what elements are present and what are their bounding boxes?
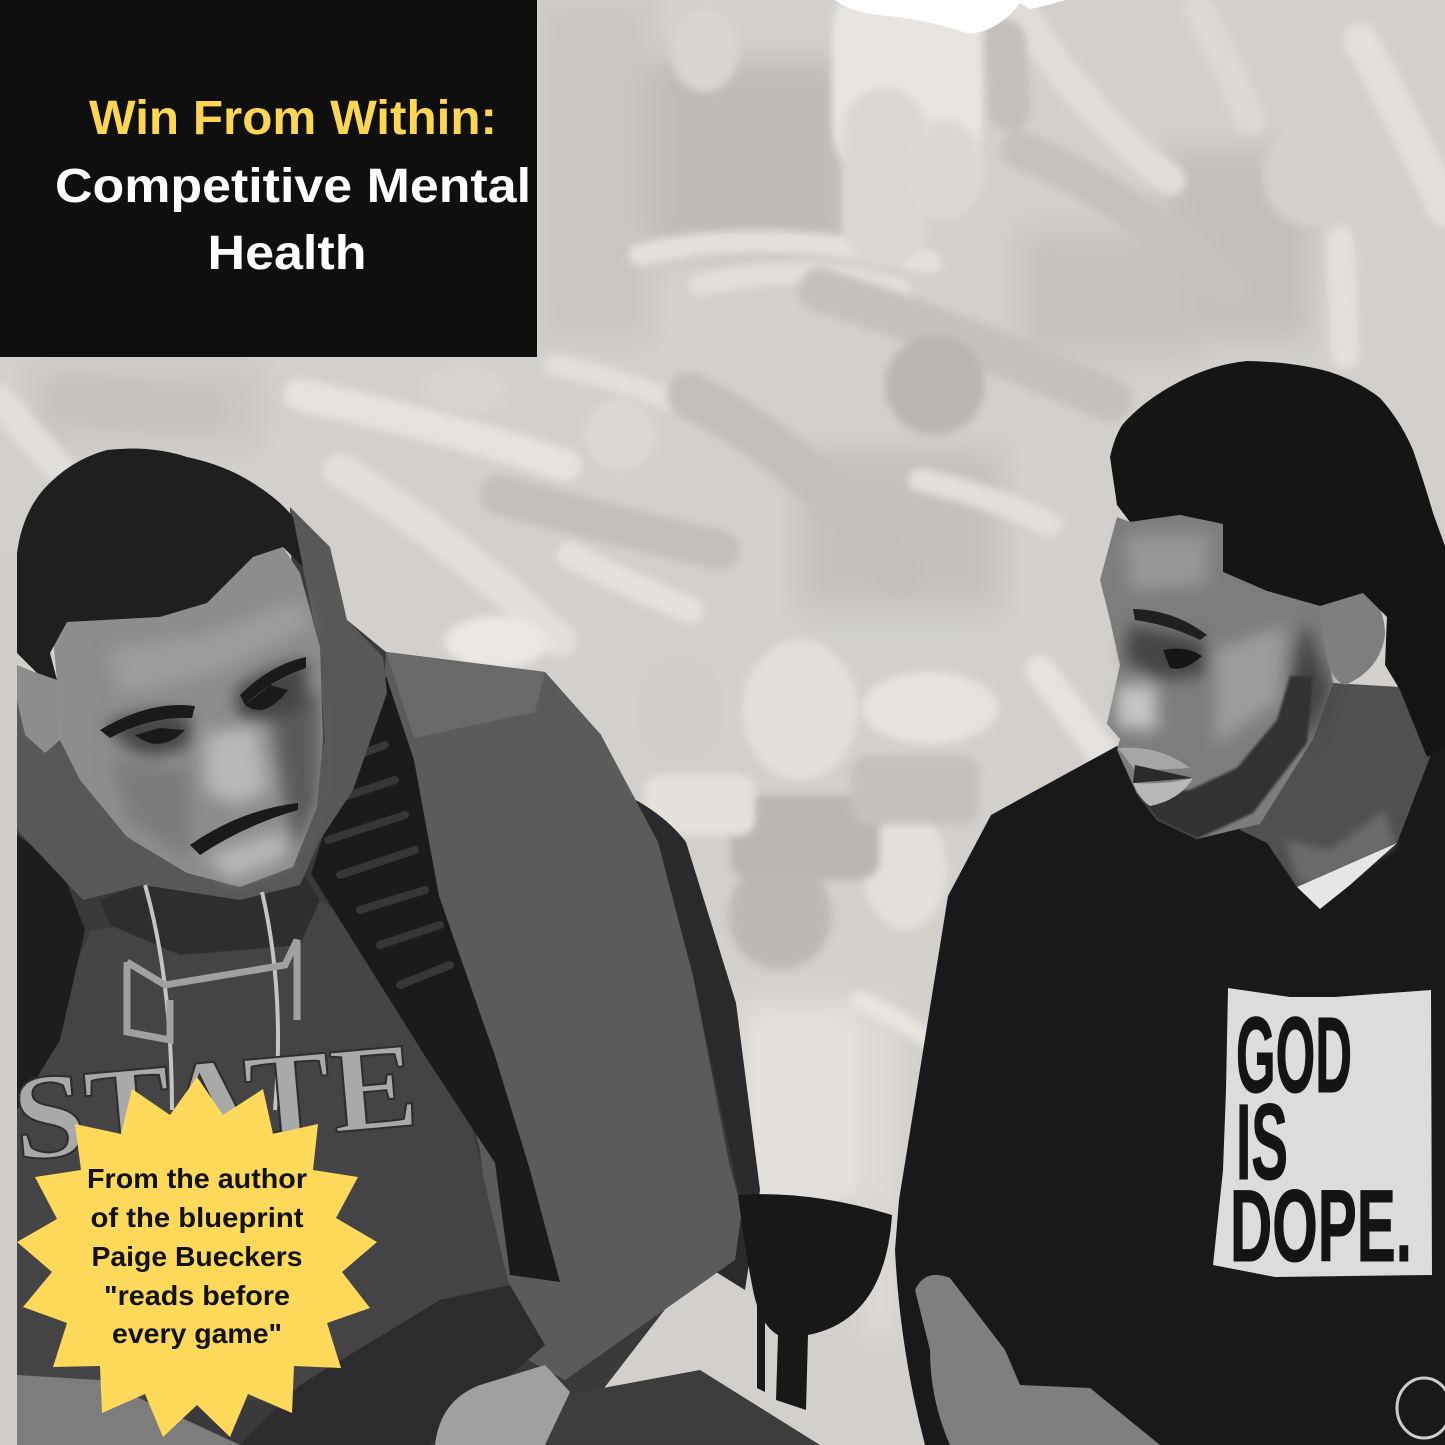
left strip: photo edge: [0, 553, 17, 1445]
left man: backpack strap right: [311, 676, 560, 1282]
right man: face: [1100, 515, 1333, 839]
left man: drawstrings: [145, 885, 278, 1110]
right man: hair: [1110, 361, 1445, 757]
right man: eyes, brow and mouth: [1118, 609, 1207, 806]
torn white paper edge at top: [835, 0, 1065, 34]
right man: neck: [1240, 683, 1430, 909]
left man: facial shading: [105, 600, 318, 880]
left man: ear: [17, 665, 60, 753]
title panel: [0, 0, 537, 357]
right man: sweatshirt: [895, 740, 1445, 1445]
cup holder on chair: [738, 1194, 892, 1410]
left man: hood: [17, 507, 387, 900]
left man: chest lettering: [8, 940, 423, 1187]
badge text: "reads before: [104, 1280, 290, 1311]
left man: strap padding ribs: [328, 745, 450, 985]
right man: [895, 361, 1445, 1445]
right man: hand: [915, 1275, 1160, 1445]
badge text: every game": [112, 1318, 282, 1349]
left man: hair: [17, 449, 303, 680]
right man: white undershirt: [1297, 843, 1397, 909]
shirt text: GOD IS DOPE: [1230, 994, 1412, 1283]
left man: body silhouette: [17, 507, 742, 1445]
left man: sleeve and shoulder: [380, 652, 742, 1380]
left man: dark hood underside: [100, 870, 320, 955]
right man: hoodie string loop: [1397, 1378, 1445, 1438]
title lines: Competitive Mental Health: [55, 160, 531, 280]
left man: strap left: [17, 835, 85, 1110]
left man: [8, 449, 820, 1445]
badge text: of the blueprint: [90, 1202, 304, 1233]
right man: ear: [1320, 593, 1385, 685]
chair behind left man: [600, 797, 760, 1290]
left man: sweatshirt chest: [17, 900, 510, 1400]
badge text: Paige Bueckers: [92, 1241, 302, 1272]
badge text: [87, 1163, 307, 1349]
right man: shirt print panel: [1213, 988, 1432, 1283]
left man: lap and sleeve bottom: [17, 1375, 240, 1445]
right man: beard: [1137, 676, 1313, 839]
left man: brows, eyes and mouth: [100, 657, 306, 855]
badge text: From the author: [87, 1163, 307, 1194]
left man: upper shoulder highlight: [386, 652, 545, 738]
right man: facial shading: [1115, 535, 1332, 745]
left man: hand: [435, 1365, 570, 1445]
title lines: Competitive Mental Health: Competitive Mental: [55, 160, 531, 213]
left man: face: [53, 547, 323, 887]
title lines: Competitive Mental Health: Health: [208, 227, 366, 280]
title line: Win From Within: Win From Within:: [89, 92, 497, 145]
yellow starburst badge: [17, 1077, 377, 1437]
right man: neck highlight: [1285, 810, 1395, 890]
shirt text: GOD IS DOPE: IS: [1236, 1081, 1288, 1202]
left man: chest lettering: STATE: [8, 1017, 423, 1187]
